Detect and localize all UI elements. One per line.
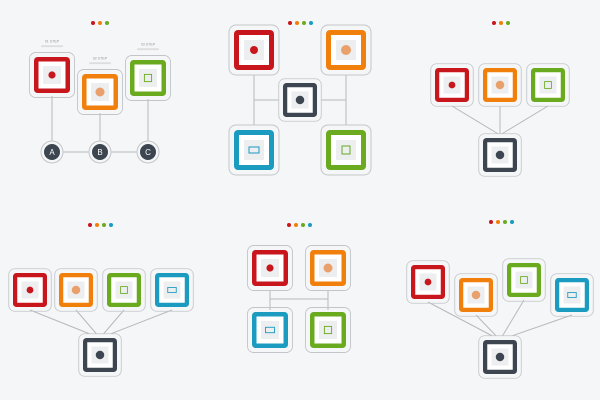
step box red	[229, 25, 279, 75]
step box green	[527, 64, 569, 106]
circle B: B	[97, 148, 103, 157]
step box blue	[229, 125, 279, 175]
step box orange	[455, 274, 497, 316]
panel: layout 3 three boxes to one	[431, 21, 569, 176]
step box red	[248, 246, 292, 290]
circle A	[41, 141, 63, 163]
step box blue	[248, 308, 292, 352]
color dots panel 5	[287, 223, 312, 227]
step box orange	[78, 57, 122, 115]
step box red	[431, 64, 473, 106]
step box red	[407, 261, 449, 303]
panel: layout 4 four boxes to one	[9, 223, 193, 376]
circle C: C	[145, 148, 151, 157]
center box dark	[79, 334, 121, 376]
connectors panel 4	[30, 310, 172, 338]
center box dark	[279, 79, 321, 121]
step box red	[30, 40, 74, 98]
color dots panel 4	[88, 223, 113, 227]
step box green	[321, 125, 371, 175]
step box orange	[321, 25, 371, 75]
color dots panel 2	[288, 21, 313, 25]
step box green	[503, 259, 545, 301]
step box orange	[479, 64, 521, 106]
connectors panel 3	[452, 106, 548, 135]
step box blue	[151, 269, 193, 311]
panel: layout 6 staggered four to one	[407, 220, 593, 378]
panel: layout 2 four boxes with center	[229, 21, 371, 175]
step box green: 03 STEP	[141, 43, 156, 47]
connectors panel 2	[254, 75, 346, 125]
step box red	[9, 269, 51, 311]
center box dark	[479, 336, 521, 378]
panel: layout 1 three steps with A B C	[30, 21, 170, 163]
step box red: 01 STEP	[45, 40, 60, 44]
connectors panel 5	[270, 290, 328, 310]
circle B	[89, 141, 111, 163]
step box orange	[306, 246, 350, 290]
circle A: A	[49, 148, 55, 157]
step box green	[103, 269, 145, 311]
connectors panel 6	[428, 300, 572, 340]
step box green	[306, 308, 350, 352]
step box green	[126, 43, 170, 101]
color dots panel 6	[489, 220, 514, 224]
panel: layout 5 four box grid	[248, 223, 350, 352]
color dots panel 3	[492, 21, 510, 25]
step box orange: 02 STEP	[93, 57, 108, 61]
step box orange	[55, 269, 97, 311]
circle C	[137, 141, 159, 163]
color dots panel 1	[91, 21, 109, 25]
step box blue	[551, 274, 593, 316]
center box dark	[479, 134, 521, 176]
connectors panel 1	[52, 96, 148, 152]
